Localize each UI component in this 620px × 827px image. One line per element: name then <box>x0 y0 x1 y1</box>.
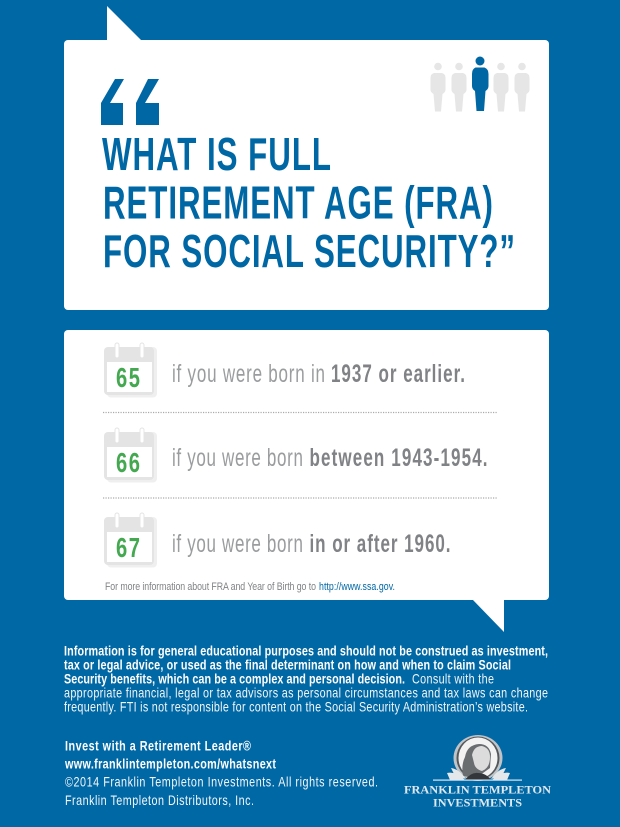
footnote: http://www.ssa.gov. <box>319 581 395 593</box>
contact and copyright text: ©2014 Franklin Templeton Investments. All rights reserved. <box>65 774 378 790</box>
text: born in or after 1960: if you were born <box>172 530 303 558</box>
text: born 1937 or earlier: 1937 or earlier. <box>331 360 465 388</box>
row: age 66 <box>104 428 488 482</box>
logo wordmark <box>404 782 551 810</box>
logo: Franklin Templeton Investments <box>404 735 551 810</box>
contact and copyright text: Invest with a Retirement Leader® <box>65 738 251 754</box>
contact and copyright text <box>64 738 378 808</box>
text: born 1937 or earlier: if you were born in <box>172 360 325 388</box>
icon: row of people with one highlighted <box>430 56 530 112</box>
disclaimer text: Information is for general educational purposes and should not be construed as investment, <box>64 643 548 659</box>
disclaimer text: tax or legal advice, or used as the final determinant on how and when to claim Social <box>64 657 511 673</box>
text: born 1937 or earlier <box>172 360 465 388</box>
icon: calendar 67 <box>104 513 157 568</box>
footnote: For more information about FRA and Year of Birth go to <box>105 581 316 593</box>
icon: calendar 65 <box>104 343 157 398</box>
icon: opening quotation mark <box>101 79 159 125</box>
icon: calendar 66: 66 <box>116 448 140 479</box>
contact and copyright text: Franklin Templeton Distributors, Inc. <box>65 793 254 808</box>
disclaimer text: frequently. FTI is not responsible for content on the Social Security Administration’s website. <box>64 699 528 715</box>
disclaimer text: Security benefits, which can be a complex and personal decision. <box>64 671 405 687</box>
title: FOR SOCIAL SECURITY?” <box>103 226 515 278</box>
disclaimer text: appropriate financial, legal or tax advisors as personal circumstances and tax laws can change <box>64 685 548 701</box>
row: age 65 <box>104 343 465 398</box>
icon: portrait medallion <box>433 735 522 781</box>
text: born between 1943-1954: if you were born <box>172 444 303 472</box>
contact and copyright text: www.franklintempleton.com/whatsnext <box>64 756 276 772</box>
title: WHAT IS FULL <box>102 129 331 181</box>
text: born between 1943-1954 <box>172 444 488 472</box>
icon: calendar 67: 67 <box>116 533 140 564</box>
disclaimer text: Consult with the <box>412 671 494 687</box>
title <box>102 129 515 278</box>
text: born between 1943-1954: between 1943-1954. <box>310 444 488 472</box>
row: age 67 <box>104 513 451 568</box>
text: born in or after 1960 <box>172 530 451 558</box>
logo wordmark: FRANKLIN TEMPLETON <box>404 782 551 796</box>
text: born in or after 1960: in or after 1960. <box>310 530 451 558</box>
icon: calendar 66 <box>104 428 157 482</box>
icon: calendar 65: 65 <box>116 363 140 394</box>
disclaimer text <box>64 643 548 715</box>
logo wordmark: INVESTMENTS <box>433 796 522 810</box>
panel: full retirement age answers <box>64 330 549 632</box>
panel: question speech bubble <box>64 6 549 310</box>
title: RETIREMENT AGE (FRA) <box>103 178 493 229</box>
